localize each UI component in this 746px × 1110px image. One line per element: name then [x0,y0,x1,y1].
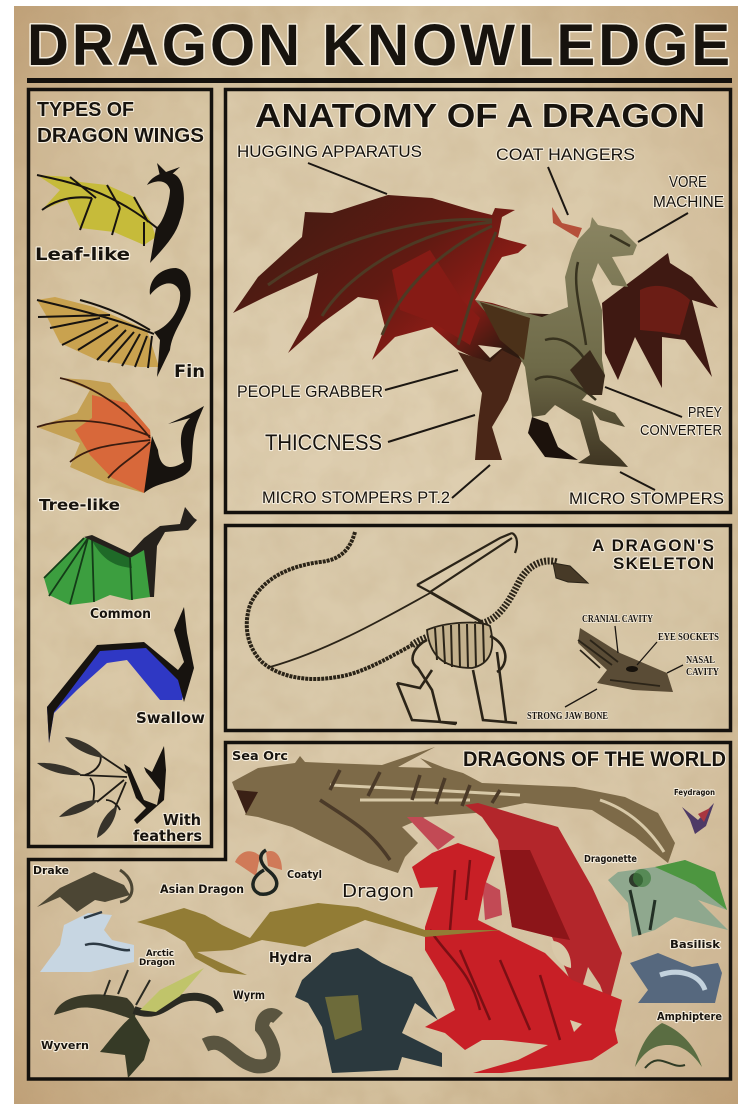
skull illustration [578,628,673,692]
skeleton illustration [247,532,588,724]
top rule [27,78,732,83]
label: Amphiptere [657,1011,722,1023]
label: asian dragon: Asian Dragon [160,882,244,896]
dragon: hydra [295,948,442,1073]
label: Dragon [342,881,414,902]
label: THICCNESS [265,430,382,455]
heading: a dragon's skeleton [592,536,714,573]
dragon: drake [33,864,132,912]
far wing [602,253,718,388]
label: Dragon [139,958,175,968]
label: Fin [174,362,205,382]
dragon: asian dragon [137,903,502,975]
dragon: wyvern [41,968,220,1078]
panel: dragons of the world [28,742,730,1079]
dragon: amphiptere [635,1011,722,1068]
label: Swallow [136,709,205,727]
heading: dragons of the world: DRAGONS OF THE WORLD [463,748,726,771]
label: MICRO STOMPERS [569,489,724,508]
label: HUGGING APPARATUS [237,142,422,161]
far legs [458,350,522,460]
label: Tree-like [39,496,120,514]
dragon: red dragon [342,803,622,1073]
heading: a dragon's skeleton: SKELETON [613,554,714,573]
dragon illustration [233,195,718,467]
label: STRONG JAW BONE [527,711,608,722]
label: PEOPLE GRABBER [237,382,383,401]
label: EYE SOCKETS [658,632,719,643]
heading: a dragon's skeleton: A DRAGON'S [592,536,714,555]
callout labels and lines [237,142,724,508]
wing: fin [37,268,205,382]
title: DRAGON KNOWLEDGE [27,13,730,78]
pink wing [407,817,502,920]
label: CONVERTER [640,422,722,439]
wing: with feathers [37,737,202,845]
wing: swallow [47,607,205,743]
label: Arctic [146,949,174,959]
gaps between wing and body [551,941,582,1032]
label: Wyvern [41,1039,89,1052]
horn [552,207,582,238]
panel: types of dragon wings [28,90,212,846]
label: CRANIAL CAVITY [582,614,654,625]
heading: types of dragon wings: TYPES OF [37,99,134,121]
label: COAT HANGERS [496,145,635,164]
dragon: arctic dragon [40,912,175,972]
heading: types of dragon wings [37,99,204,147]
body [475,217,637,467]
label: Basilisk [670,938,721,951]
panel: anatomy of a dragon [226,90,730,512]
body [412,843,622,1073]
wing: tree-like [37,378,204,514]
near wing [233,195,565,370]
dragon: coatyl [235,850,322,894]
label: Feydragon [674,788,715,797]
wing: leaf-like [35,163,184,265]
label: Drake [33,864,69,877]
dragon: dragonette [584,854,728,937]
skull labels [527,614,720,722]
panel: a dragon's skeleton [226,526,730,730]
heading: anatomy of a dragon: ANATOMY OF A DRAGON [255,97,705,134]
heading: types of dragon wings: DRAGON WINGS [37,125,204,147]
dragon: feydragon [674,788,715,834]
dragon: wyrm [205,988,278,1066]
dragon: basilisk [630,938,722,1003]
label: With [163,811,201,829]
label: Leaf-like [35,245,130,265]
label: MICRO STOMPERS PT.2 [262,488,450,507]
label: VORE [669,174,707,191]
dragon: sea orc [232,747,675,873]
label: Coatyl [287,868,322,881]
wing: common [44,507,197,622]
label: Sea Orc [232,748,288,763]
main wing [465,803,622,1023]
label: MACHINE [653,194,724,211]
label: Dragonette [584,854,637,865]
label: PREY [688,404,722,421]
label: Common [90,606,151,622]
label: CAVITY [686,667,720,678]
label: Wyrm [233,988,265,1002]
label: hydra: Hydra [269,950,312,966]
label: NASAL [686,655,715,666]
label: feathers [133,827,202,845]
